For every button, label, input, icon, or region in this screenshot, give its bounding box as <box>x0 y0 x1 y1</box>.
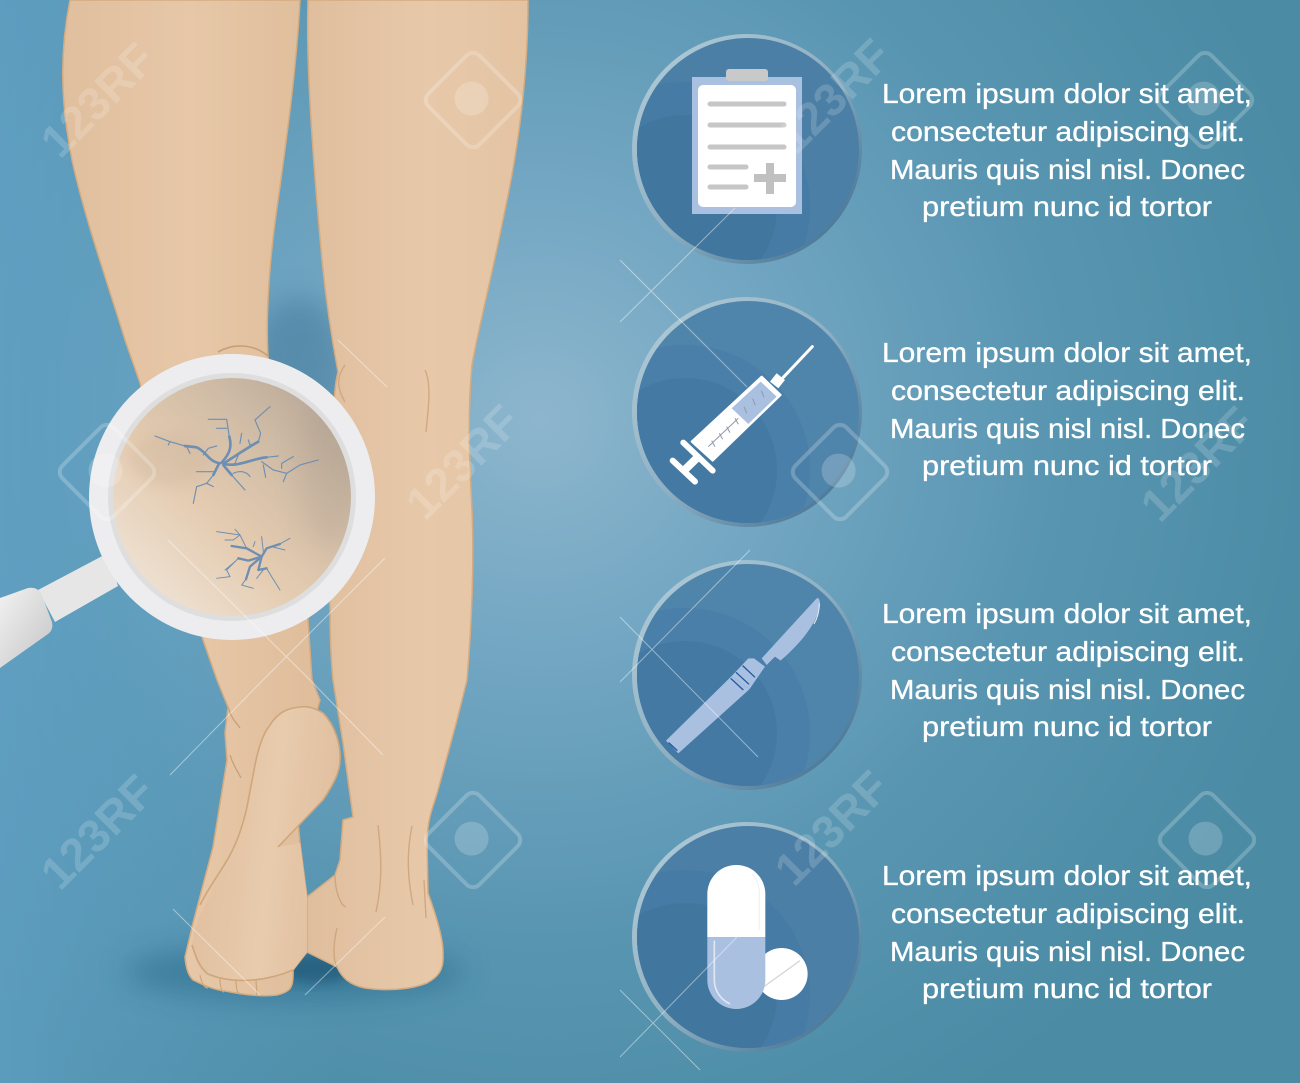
watermark logos <box>56 49 1258 891</box>
watermark wordmarks: 123RF <box>1130 397 1265 531</box>
text block 4: Lorem ipsum dolor sit amet, <box>882 860 1252 891</box>
text block 4: consectetur adipiscing elit. <box>891 898 1245 929</box>
text block 3 <box>882 598 1252 742</box>
syringe icon <box>673 347 812 482</box>
text block 1: Mauris quis nisl nisl. Donec <box>890 154 1245 185</box>
watermark hairlines <box>168 208 758 1070</box>
text block 4: pretium nunc id tortor <box>922 973 1212 1004</box>
outer rim <box>89 354 375 640</box>
pill icon <box>707 865 808 1009</box>
magnifying glass <box>0 354 375 668</box>
floor shadow <box>125 944 465 1000</box>
lens skin view <box>113 378 360 616</box>
text block 3: pretium nunc id tortor <box>922 711 1212 742</box>
text block 1 <box>882 78 1252 222</box>
icon badge: clipboard <box>632 34 862 264</box>
sole of raised foot <box>192 707 340 981</box>
watermark wordmarks: 123RF <box>30 33 165 167</box>
text block 2: Lorem ipsum dolor sit amet, <box>882 337 1252 368</box>
watermark wordmarks: 123RF <box>395 395 530 529</box>
right leg creases <box>334 365 429 967</box>
icon badge: capsule and tablet <box>632 822 862 1052</box>
text block 4 <box>882 860 1252 1004</box>
text block 1: pretium nunc id tortor <box>922 191 1212 222</box>
text block 4: Mauris quis nisl nisl. Donec <box>890 936 1245 967</box>
sole outline <box>192 707 340 980</box>
watermark wordmarks: 123RF <box>766 29 901 163</box>
text block 2: consectetur adipiscing elit. <box>891 375 1245 406</box>
icon badge: syringe <box>632 297 862 527</box>
calf creases <box>228 707 241 778</box>
text block 1: consectetur adipiscing elit. <box>891 116 1245 147</box>
text block 3: consectetur adipiscing elit. <box>891 636 1245 667</box>
left leg <box>63 0 320 996</box>
text block 3: Lorem ipsum dolor sit amet, <box>882 598 1252 629</box>
text block 2: Mauris quis nisl nisl. Donec <box>890 413 1245 444</box>
scalpel icon <box>666 598 820 753</box>
watermark wordmarks: 123RF <box>764 761 899 895</box>
knee crease <box>218 346 268 356</box>
watermark wordmarks: 123RF <box>30 765 165 899</box>
right leg <box>307 0 528 990</box>
watermark wordmarks <box>30 29 1265 899</box>
text block 3: Mauris quis nisl nisl. Donec <box>890 674 1245 705</box>
spider veins, upper cluster <box>155 407 318 503</box>
clipboard icon <box>692 69 802 214</box>
text block 1: Lorem ipsum dolor sit amet, <box>882 78 1252 109</box>
spider veins, lower cluster <box>217 529 290 590</box>
text block 2: pretium nunc id tortor <box>922 450 1212 481</box>
handle <box>0 553 118 668</box>
text block 2 <box>882 337 1252 481</box>
shadow behind knees <box>252 297 348 433</box>
figure: legs seen from behind <box>63 0 528 996</box>
toes <box>200 975 257 995</box>
icon badge: scalpel <box>632 560 862 790</box>
